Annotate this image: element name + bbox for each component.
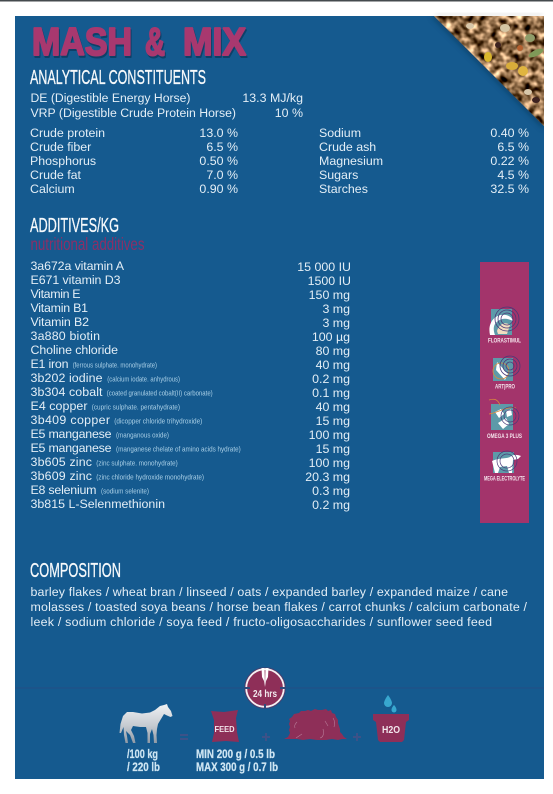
constituents right column: 0.22 %	[490, 154, 529, 168]
title	[32, 21, 247, 66]
dosage label: MIN 200 g / 0.5 lb	[196, 747, 275, 761]
composition text: molasses / toasted soya beans / horse bean flakes / carrot chunks / calcium carbonate /	[30, 600, 528, 614]
icon: 24 hours clock	[244, 668, 286, 709]
icon: art pro: ART|PRO	[495, 384, 515, 390]
additives table: (sodium selenite)	[101, 486, 149, 496]
icon: hay	[284, 709, 347, 740]
dosage label	[196, 747, 278, 774]
title: MIX	[183, 21, 246, 64]
constituents left column	[30, 126, 238, 196]
constituents right column: Magnesium	[319, 154, 383, 168]
equals sign	[180, 734, 188, 740]
icon: mega electrolyte	[484, 451, 525, 482]
additives table: (calcium iodate. anhydrous)	[107, 374, 180, 384]
additives table: 3b202 iodine	[30, 371, 103, 385]
additives table: (cupric sulphate. pentahydrate)	[92, 402, 180, 412]
constituents left column: Crude fiber	[30, 140, 91, 154]
heading: analytical constituents: ANALYTICAL CONSTITUENTS	[30, 67, 206, 89]
icon: horse	[120, 704, 172, 743]
additives table: 40 mg	[316, 358, 350, 372]
constituents right column: 32.5 %	[490, 182, 529, 196]
heading: additives per kg: ADDITIVES/KG	[30, 215, 119, 237]
constituents left column: Crude fat	[30, 168, 82, 182]
energy values: DE (Digestible Energy Horse)	[30, 91, 190, 105]
additives table: (ferrous sulphate. monohydrate)	[73, 360, 157, 370]
additives table: (zinc sulphate. monohydrate)	[96, 458, 178, 468]
additives table: (dicopper chloride trihydroxide)	[114, 416, 203, 426]
additives table: 15 000 IU	[297, 260, 351, 274]
icon: water bucket: H2O	[382, 725, 400, 736]
constituents right column: Sodium	[319, 126, 361, 140]
additives table: 0.2 mg	[312, 372, 350, 386]
additives table: (manganous oxide)	[116, 430, 169, 440]
constituents right column: Starches	[319, 182, 368, 196]
constituents left column: Calcium	[30, 182, 75, 196]
constituents left column: 7.0 %	[206, 168, 238, 182]
energy values: 13.3 MJ/kg	[242, 91, 303, 105]
additives table: 3b815 L-Selenmethionin	[30, 497, 165, 511]
additives table: Vitamin E	[30, 287, 80, 301]
additives table: 100 mg	[309, 456, 350, 470]
icon: florastimul	[488, 307, 521, 344]
constituents left column: 0.50 %	[199, 154, 238, 168]
title: MIX	[184, 23, 247, 66]
additives table: 1500 IU	[308, 274, 351, 288]
additives table: 0.3 mg	[312, 484, 350, 498]
additives table: (zinc chloride hydroxide monohydrate)	[96, 472, 204, 482]
constituents right column	[319, 126, 529, 196]
additives table: E8 selenium	[30, 483, 96, 497]
subheading: nutritional additives: nutritional additives	[30, 234, 145, 254]
composition text: leek / sodium chloride / soya feed / fructo-oligosaccharides / sunflower seed feed	[30, 615, 492, 629]
icon: omega 3 plus	[487, 399, 522, 440]
plus sign	[353, 733, 361, 741]
weight label: / 220 lb	[127, 760, 160, 774]
additives table: 3a880 biotin	[30, 329, 100, 343]
energy values: 10 %	[275, 106, 303, 120]
icon: mega electrolyte: MEGA ELECTROLYTE	[484, 476, 525, 482]
additives table: 0.1 mg	[312, 386, 350, 400]
constituents right column: 0.40 %	[490, 126, 529, 140]
additives table: 0.2 mg	[312, 498, 350, 512]
title: &	[146, 23, 166, 66]
constituents left column: 6.5 %	[206, 140, 238, 154]
top rule	[0, 0, 553, 2]
additives table: 3b609 zinc	[30, 469, 92, 483]
additives table: E4 copper	[30, 399, 88, 413]
constituents left column: 13.0 %	[199, 126, 238, 140]
additives table: 150 mg	[309, 288, 350, 302]
panel: product sidebar	[480, 262, 529, 523]
dosage label: MAX 300 g / 0.7 lb	[196, 760, 278, 774]
additives table: Vitamin B1	[30, 301, 88, 315]
constituents right column: 4.5 %	[497, 168, 529, 182]
constituents right column: Crude ash	[319, 140, 376, 154]
additives table: 3b605 zinc	[30, 455, 92, 469]
additives table: (coated granulated cobalt(II) carbonate)	[107, 388, 213, 398]
icon: art pro	[493, 356, 520, 390]
additives table: 3a672a vitamin A	[30, 259, 125, 273]
additives table: 3b409 copper	[30, 413, 110, 427]
weight label	[127, 747, 160, 774]
energy values	[30, 91, 303, 120]
icon: florastimul: FLORASTIMUL	[488, 338, 521, 344]
additives table: 3 mg	[322, 302, 350, 316]
additives table: 100 mg	[309, 428, 350, 442]
additives table: E5 manganese	[30, 427, 112, 441]
icon: feed bag	[211, 710, 239, 742]
additives table: Vitamin B2	[30, 315, 89, 329]
icon: water bucket	[373, 714, 409, 742]
additives table: E1 iron	[30, 357, 69, 371]
plus sign	[262, 733, 270, 741]
title: &	[145, 21, 165, 64]
additives table: 3 mg	[322, 316, 350, 330]
energy values: VRP (Digestible Crude Protein Horse)	[30, 106, 236, 120]
additives table: 3b304 cobalt	[30, 385, 103, 399]
additives table: 100 µg	[312, 330, 350, 344]
constituents right column: Sugars	[319, 168, 358, 182]
icon: feed bag: FEED	[214, 724, 234, 734]
constituents left column: 0.90 %	[199, 182, 238, 196]
title: MASH	[33, 23, 133, 66]
faint divider	[15, 688, 544, 689]
additives table: 40 mg	[316, 400, 350, 414]
additives table: (manganese chelate of amino acids hydrate)	[116, 444, 241, 454]
composition text: barley flakes / wheat bran / linseed / oats / expanded barley / expanded maize / cane	[30, 585, 508, 599]
icon: omega 3 plus: OMEGA 3 PLUS	[487, 434, 522, 440]
title: MASH	[32, 21, 132, 64]
additives table: E5 manganese	[30, 441, 112, 455]
icon: 24 hours clock: 24 hrs	[253, 688, 277, 700]
additives table: 15 mg	[316, 442, 350, 456]
weight label: /100 kg	[127, 747, 158, 761]
composition text	[30, 585, 528, 629]
additives table: Choline chloride	[30, 343, 118, 357]
additives table: 15 mg	[316, 414, 350, 428]
constituents left column: Phosphorus	[30, 154, 96, 168]
image: grain mix corner	[431, 13, 545, 129]
additives table: 20.3 mg	[305, 470, 350, 484]
additives table: 80 mg	[316, 344, 350, 358]
constituents right column: 6.5 %	[497, 140, 529, 154]
additives table: E671 vitamin D3	[30, 273, 121, 287]
icon: water drops	[384, 695, 396, 712]
additives table	[30, 259, 351, 512]
constituents left column: Crude protein	[30, 126, 105, 140]
heading: composition: COMPOSITION	[30, 560, 121, 582]
